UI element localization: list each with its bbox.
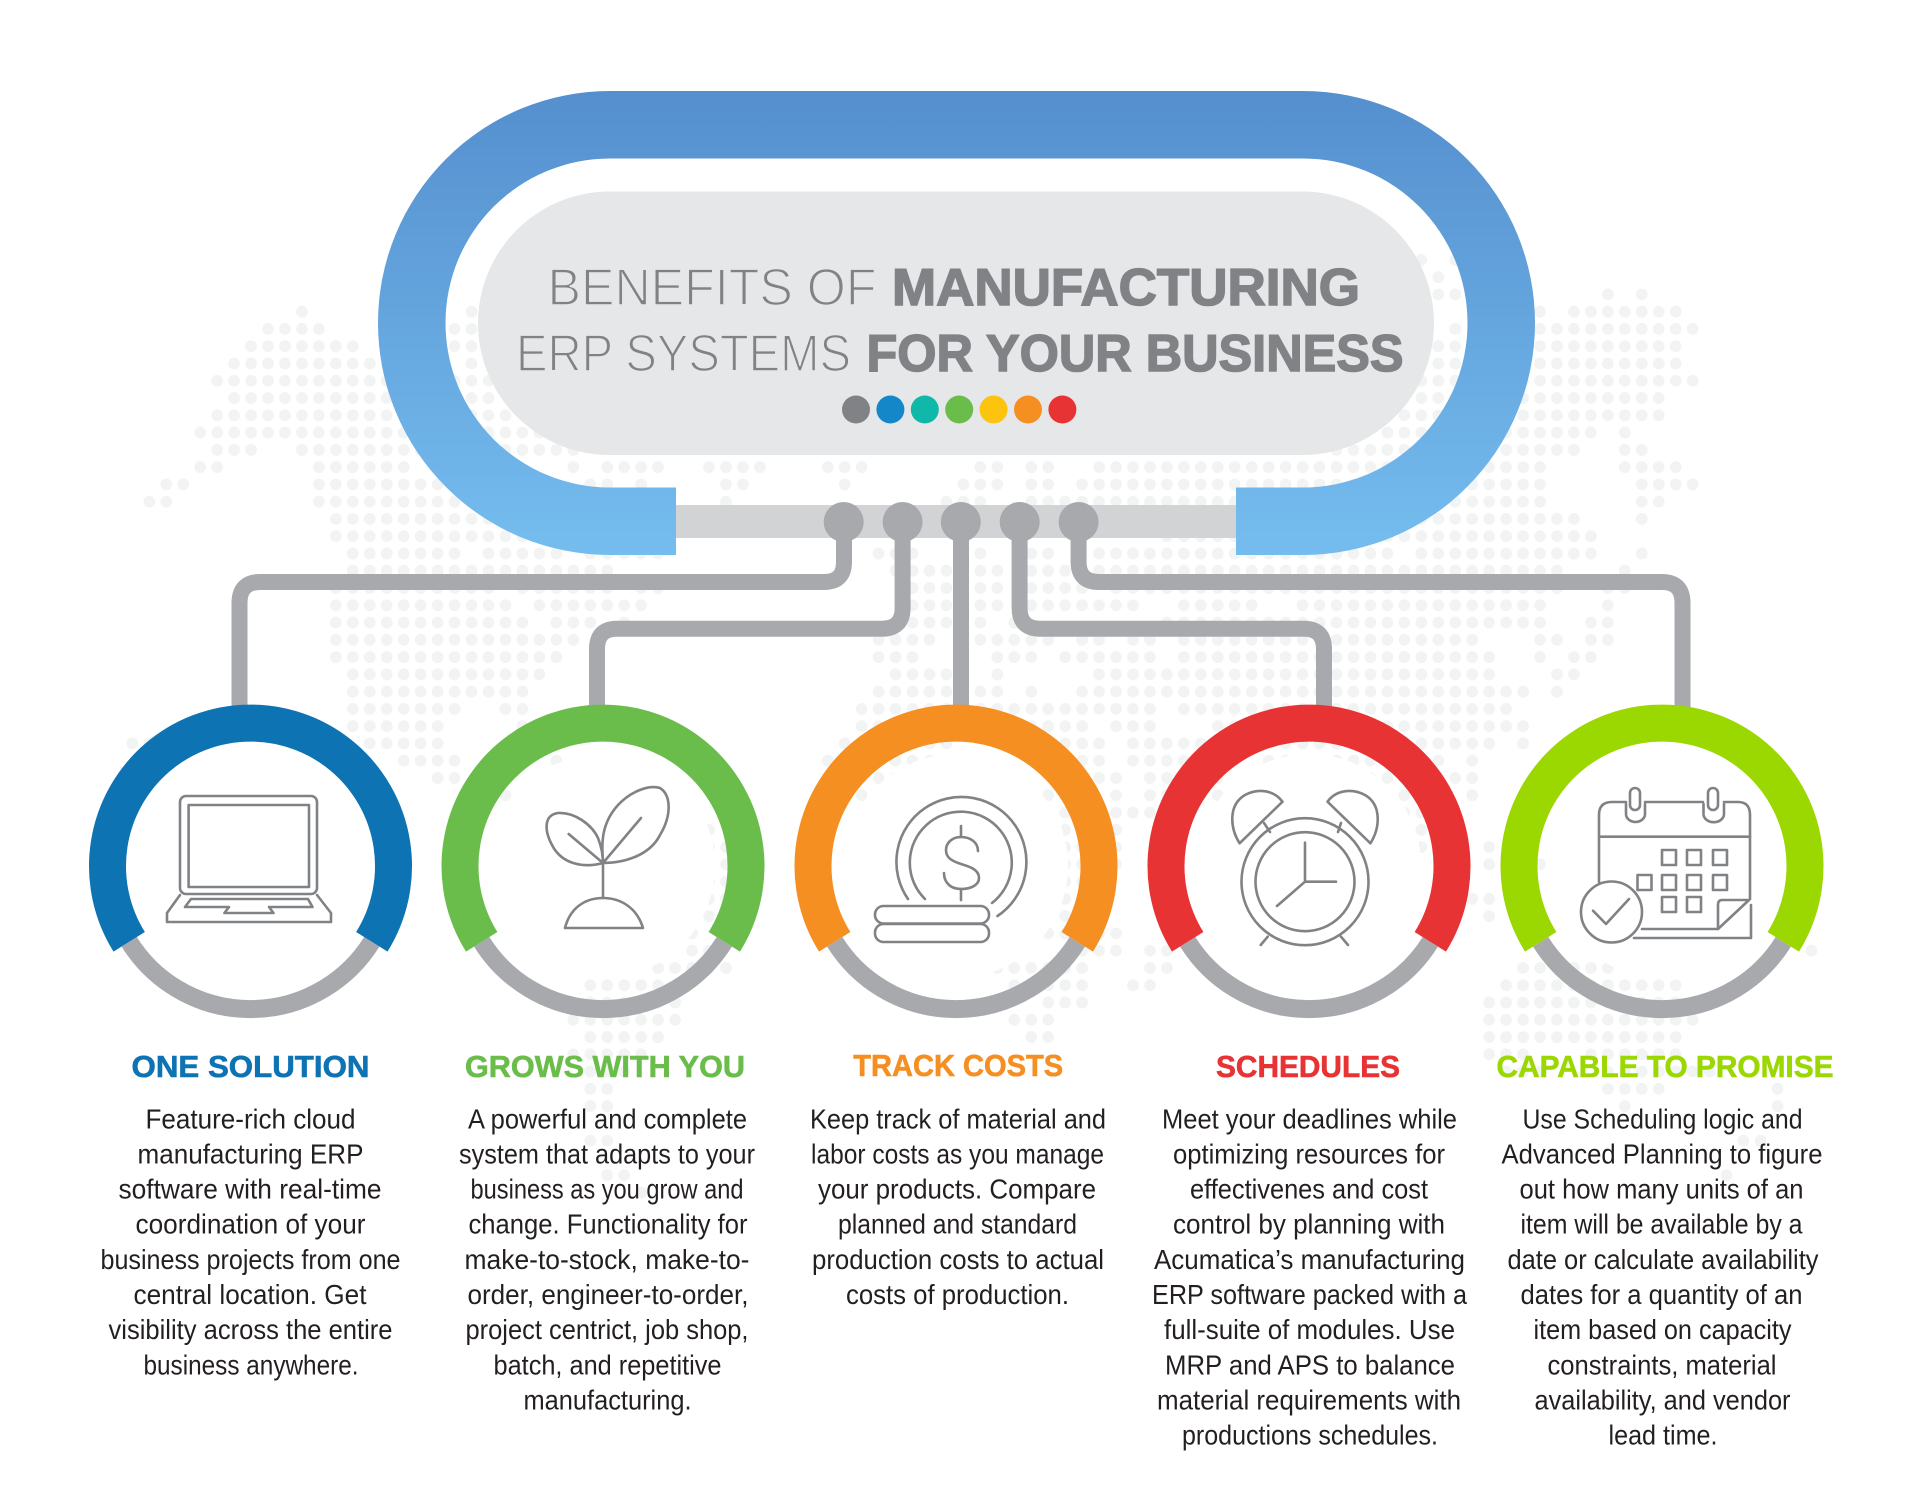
text: schedules description: material requirements with [1157,1384,1461,1415]
text: schedules description: optimizing resources for [1173,1138,1445,1169]
panel: one solution [100,723,400,1380]
text: one solution description: visibility across the entire [108,1314,392,1345]
ring: blue arc [107,723,394,942]
text: one solution description: business anywhere. [144,1349,358,1380]
heading: capable to promise: CAPABLE TO PROMISE [1496,1049,1834,1084]
text: grows with you description [459,1103,755,1415]
text: grows with you description: change. Functionality for [468,1209,748,1240]
text: schedules description: full-suite of modules. Use [1164,1314,1455,1345]
connector bar [670,505,1242,538]
panel: schedules [1152,723,1467,1451]
text: track costs description: labor costs as you manage [811,1138,1104,1169]
text: grows with you description: project centrict, job shop, [466,1314,748,1345]
text: one solution description: manufacturing ERP [138,1138,364,1169]
title: BENEFITS OF [548,259,876,317]
text: one solution description [100,1103,400,1380]
heading: schedules: SCHEDULES [1216,1049,1400,1084]
text: capable to promise description: constraints, material [1548,1349,1776,1380]
text: track costs description [810,1103,1106,1310]
ring: gray base [482,942,724,1009]
text: grows with you description: system that adapts to your [459,1138,755,1169]
text: track costs description: Keep track of material and [810,1103,1106,1134]
ring: gray base [1541,942,1783,1009]
text: one solution description: business projects from one [100,1244,400,1275]
text: capable to promise description: availability, and vendor [1534,1384,1790,1415]
text: one solution description: Feature-rich cloud [146,1103,356,1134]
text: track costs description: costs of production. [846,1279,1069,1310]
heading: grows with you: GROWS WITH YOU [465,1049,745,1084]
ring: green arc [460,723,746,942]
text: capable to promise description: out how many units of an [1520,1174,1804,1205]
text: capable to promise description: item based on capacity [1534,1314,1792,1345]
text: schedules description: control by planning with [1173,1209,1445,1240]
text: schedules description: MRP and APS to balance [1165,1349,1455,1380]
text: grows with you description: A powerful and complete [468,1103,747,1134]
text: grows with you description: batch, and repetitive [494,1349,722,1380]
text: capable to promise description: Use Scheduling logic and [1522,1103,1802,1134]
blue capsule frame [378,91,1535,555]
panel: track costs [810,723,1106,1310]
text: capable to promise description [1502,1103,1822,1451]
background: dotted world map [132,260,1812,1192]
text: capable to promise description: item will be available by a [1520,1209,1803,1240]
ring: gray base [129,942,372,1009]
ring: red arc [1166,723,1452,942]
icon: calendar with check [1581,788,1751,942]
title panel [478,192,1434,455]
colored dots row [842,396,1076,424]
connector lines with knobs [240,502,1682,712]
ring: gray base [835,942,1077,1009]
title: FOR YOUR BUSINESS [866,325,1404,383]
title: ERP SYSTEMS [516,325,851,383]
icon: dollar coin stack [875,797,1026,942]
title: MANUFACTURING [892,259,1360,317]
text: schedules description: ERP software packed with a [1152,1279,1467,1310]
panel: grows with you [459,723,755,1415]
icon: laptop [167,796,331,922]
text: one solution description: software with real-time [118,1174,382,1205]
text: grows with you description: manufacturing. [524,1384,692,1415]
text: grows with you description: business as you grow and [470,1174,744,1205]
text: track costs description: your products. Compare [818,1174,1096,1205]
text: track costs description: planned and standard [838,1209,1077,1240]
title [516,259,1404,383]
text: capable to promise description: dates for a quantity of an [1520,1279,1802,1310]
text: capable to promise description: lead time. [1608,1420,1718,1451]
ring: lime arc [1519,723,1805,942]
icon: sprout [547,787,669,928]
panel: capable to promise [1496,723,1834,1451]
text: one solution description: central location. Get [134,1279,367,1310]
text: schedules description: effectivenes and cost [1190,1174,1428,1205]
text: schedules description: Acumatica’s manufacturing [1154,1244,1465,1275]
text: capable to promise description: Advanced Planning to figure [1502,1138,1822,1169]
icon: alarm clock [1232,791,1378,945]
text: grows with you description: order, engineer-to-order, [468,1279,748,1310]
text: schedules description: Meet your deadlines while [1162,1103,1457,1134]
text: capable to promise description: date or calculate availability [1508,1244,1818,1275]
heading: one solution: ONE SOLUTION [132,1049,370,1084]
text: one solution description: coordination of your [136,1209,366,1240]
ring: gray base [1188,942,1430,1009]
text: track costs description: production costs to actual [812,1244,1104,1275]
text: schedules description: productions schedules. [1182,1420,1438,1451]
text: schedules description [1152,1103,1467,1451]
ring: orange arc [813,723,1099,942]
heading: track costs: TRACK COSTS [853,1048,1063,1083]
text: grows with you description: make-to-stock, make-to- [464,1244,750,1275]
